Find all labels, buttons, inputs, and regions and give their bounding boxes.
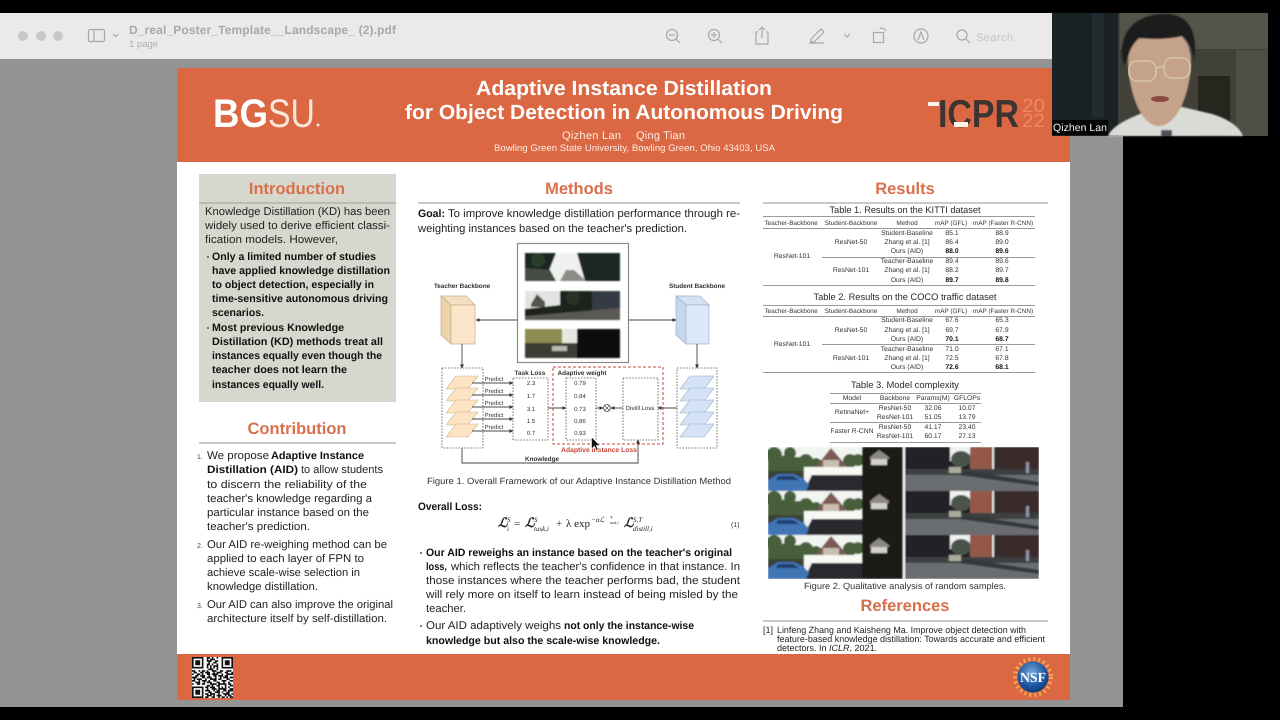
contribution list: Adaptive Instance (271, 450, 364, 462)
table 1: KITTI: 89.4 (945, 258, 959, 265)
table 1: KITTI: Zhang et al. [1] (884, 239, 930, 246)
predict arrows (472, 376, 513, 431)
adaptive instance loss box: Distill Loss (626, 405, 654, 412)
title: for Object Detection in Autonomous Driving (405, 101, 843, 124)
loss formula: ℒ (525, 515, 535, 530)
table 1: KITTI: Table 1. Results on the KITTI dataset (830, 205, 981, 216)
contribution list: achieve scale-wise selection in (207, 567, 360, 579)
table 2: COCO traffic: Zhang et al. [1] (884, 327, 930, 334)
contribution list: We propose (207, 450, 269, 462)
introduction paragraph: widely used to derive efficient classi- (204, 220, 390, 232)
goal statement: Goal: (418, 208, 445, 220)
reference entry: feature-based knowledge distillation: Towards accurate and efficient (777, 634, 1045, 644)
arrow: image to teacher (476, 319, 517, 321)
loss formula: S,T (633, 516, 643, 524)
figure 2 caption: Figure 2. Qualitative analysis of random samples. (804, 581, 1006, 591)
reference entry (763, 625, 1045, 653)
table 1: KITTI: 89.8 (995, 277, 1009, 284)
methods bullets: which reflects the teacher's confidence in that instance. In (450, 561, 740, 573)
logo: NSF: NSF (1020, 671, 1046, 686)
predict arrows: Predict (485, 376, 504, 383)
table 2: COCO traffic: Table 2. Results on the COCO traffic dataset (814, 292, 997, 303)
input image samples (518, 244, 628, 362)
loss formula: S (534, 516, 538, 524)
knowledge arrow (462, 440, 638, 463)
table 1: KITTI: 88.0 (945, 248, 959, 255)
adaptive instance loss box: 0.73 (574, 406, 586, 413)
goal statement: To improve knowledge distillation performance through re- (448, 208, 740, 220)
teacher backbone cube: Teacher Backbone (434, 283, 491, 290)
loss formula: i (507, 525, 509, 533)
introduction paragraph: fication models. However, (205, 234, 338, 246)
contribution list: Our AID re-weighing method can be (207, 539, 387, 551)
introduction bullets: to object detection, especially in (212, 279, 374, 291)
table 1: KITTI: 89.6 (995, 248, 1009, 255)
loss formula: + (556, 518, 562, 530)
poster white body (177, 68, 1070, 700)
heading: methods: Methods (545, 180, 613, 198)
authors (562, 130, 685, 142)
table 2: COCO traffic: 68.1 (995, 364, 1009, 371)
table 2: COCO traffic: Teacher-Baseline (881, 346, 933, 353)
table 2: COCO traffic: 71.0 (945, 346, 959, 353)
contribution list: Distillation (AID) (207, 464, 298, 476)
panel: results (763, 180, 1048, 653)
table 1: KITTI: 89.6 (995, 258, 1009, 265)
table 1: KITTI: mAP (Faster R-CNN) (973, 220, 1033, 227)
reference entry: [1] (763, 625, 773, 635)
poster (177, 68, 1070, 700)
window buttons (18, 31, 63, 41)
table 2: COCO traffic: 65.3 (995, 317, 1009, 324)
loss formula (498, 515, 653, 533)
contribution list: architecture itself by self-distillation. (207, 613, 387, 625)
loss formula: task,i (534, 525, 549, 533)
loss formula: task,i (610, 520, 619, 525)
contribution list: knowledge distillation. (207, 581, 318, 593)
page count: 1 page (129, 39, 158, 50)
predict arrows: Predict (485, 388, 504, 395)
introduction bullets: instances equally well. (212, 379, 324, 391)
table 2: COCO traffic: Ours (AID) (891, 336, 923, 343)
task loss values (513, 370, 548, 440)
table 3: model complexity: Table 3. Model complexity (851, 380, 959, 391)
chevron (844, 34, 850, 37)
rotate icon (874, 28, 886, 42)
table 2: COCO traffic (763, 292, 1035, 372)
methods bullets: Our AID reweighs an instance based on the teacher's original (426, 547, 732, 559)
table 3: model complexity: 32.06 (924, 405, 942, 412)
introduction bullets: have applied knowledge distillation (212, 265, 390, 277)
table 2: COCO traffic: mAP (Faster R-CNN) (973, 308, 1033, 315)
contribution list: teacher's knowledge regarding a (207, 493, 373, 505)
authors: Qizhen Lan (562, 130, 621, 142)
table 2: COCO traffic: Student-Baseline (881, 317, 933, 324)
table 2: COCO traffic: mAP (GFL) (935, 308, 967, 315)
table 1: KITTI: 86.4 (945, 239, 959, 246)
table 1: KITTI: ResNet-101 (774, 253, 810, 260)
search field: Search (976, 32, 1013, 44)
sidebar icon (88, 30, 118, 42)
methods bullets (420, 547, 741, 647)
table 1: KITTI: mAP (GFL) (935, 220, 967, 227)
task loss values: 2.3 (527, 380, 536, 387)
table 1: KITTI: ResNet-101 (833, 267, 869, 274)
table 1: KITTI: Teacher-Backbone (764, 220, 818, 227)
contribution list: 1. (197, 454, 203, 461)
affiliation: Bowling Green State University, Bowling Green, Ohio 43403, USA (494, 143, 776, 154)
loss formula: S (507, 516, 511, 524)
table 2: COCO traffic: Teacher-Backbone (764, 308, 818, 315)
table 3: model complexity: Params(M) (916, 395, 950, 402)
table 3: model complexity: GFLOPs (954, 395, 981, 402)
table 2: COCO traffic: 67.6 (945, 317, 959, 324)
student backbone cube: Student Backbone (669, 283, 725, 290)
loss formula: ℒ (624, 515, 634, 530)
table 1: KITTI: 88.9 (995, 230, 1009, 237)
PDF viewer toolbar (0, 13, 1052, 59)
adaptive instance loss box: 0.79 (574, 380, 586, 387)
glasses (1129, 58, 1190, 81)
table 1: KITTI: 85.1 (945, 230, 959, 237)
methods bullets: Our AID adaptively weighs (426, 620, 561, 632)
title: Adaptive Instance Distillation (476, 77, 772, 100)
table 2: COCO traffic: 70.1 (945, 336, 959, 343)
contribution list: applied to each layer of FPN to (207, 553, 364, 565)
table 2: COCO traffic: Method (896, 308, 918, 315)
markup icon (914, 29, 928, 43)
knowledge arrow: Knowledge (525, 456, 559, 463)
table 2: COCO traffic: Zhang et al. [1] (884, 355, 930, 362)
loss formula: λ exp (566, 518, 590, 530)
table 2: COCO traffic: ResNet-50 (835, 327, 867, 334)
introduction bullets: scenarios. (212, 307, 264, 319)
diagram: framework of adaptive instance distillation (434, 244, 725, 463)
arrow: student to FPN (696, 344, 698, 368)
table 2: COCO traffic: 72.6 (945, 364, 959, 371)
webcam: presenter video (1052, 13, 1268, 136)
adaptive instance loss box: 0.86 (574, 418, 586, 425)
student feature layers (677, 368, 717, 448)
table 2: COCO traffic: ResNet-101 (774, 341, 810, 348)
title (405, 77, 843, 124)
goal statement: weighting instances based on the teacher's prediction. (417, 223, 687, 235)
logo: BGSU: BG (213, 92, 268, 136)
pen icon (809, 29, 824, 43)
heading: introduction: Introduction (249, 180, 345, 198)
introduction bullets (207, 251, 390, 391)
table 1: KITTI: 89.0 (995, 239, 1009, 246)
logo: BGSU: SU (268, 92, 315, 136)
arrow: task loss to adaptive weight (548, 407, 566, 409)
introduction paragraph (204, 206, 390, 246)
table 3: model complexity: Backbone (880, 395, 910, 402)
introduction bullets: time-sensitive autonomous driving (212, 293, 388, 305)
table 3: model complexity (830, 380, 981, 442)
table 3: model complexity: Faster R-CNN (830, 428, 874, 435)
heading: contribution: Contribution (248, 420, 346, 438)
file name: D_real_Poster_Template__Landscape_ (2).pdf (129, 23, 397, 37)
zoom in icon (708, 30, 722, 43)
reference entry: detectors. In ICLR, 2021. (777, 643, 877, 653)
table 1: KITTI: Method (896, 220, 918, 227)
background wall (1120, 13, 1268, 49)
table 1: KITTI: 89.7 (995, 267, 1009, 274)
loss formula: −αℒ (591, 516, 605, 524)
table 3: model complexity: 23.40 (958, 424, 976, 431)
heading: references: References (861, 597, 949, 615)
authors: Qing Tian (636, 130, 685, 142)
student backbone cube (669, 283, 725, 344)
presenter figure (1108, 14, 1243, 136)
loss formula: ℒ (498, 515, 508, 530)
contribution list: particular instance based on the (207, 507, 369, 519)
teacher backbone cube (434, 283, 491, 344)
logo: BGSU (213, 92, 320, 136)
panel: introduction (199, 174, 396, 402)
table 2: COCO traffic: Student-Backbone (825, 308, 878, 315)
introduction bullets: Distillation (KD) methods treat all (212, 336, 383, 348)
figure 1 caption: Figure 1. Overall Framework of our Adaptive Instance Distillation Method (427, 476, 731, 486)
table 3: model complexity: 27.13 (958, 433, 976, 440)
task loss values: Task Loss (515, 370, 546, 377)
contribution list (197, 450, 393, 625)
poster header band (177, 68, 1070, 162)
task loss values: 1.5 (527, 418, 536, 425)
contribution list: 2. (197, 543, 203, 550)
table 1: KITTI: Student-Baseline (881, 230, 933, 237)
methods bullets: not only the instance-wise (564, 620, 694, 632)
table 3: model complexity: 60.17 (924, 433, 942, 440)
table 3: model complexity: ResNet-101 (877, 433, 913, 440)
table 3: model complexity: ResNet-50 (879, 424, 911, 431)
table 1: KITTI: Ours (AID) (891, 277, 923, 284)
contribution list: to discern the reliability of the (207, 479, 367, 491)
figure 2: qualitative samples (766, 447, 1039, 579)
table 1: KITTI: Student-Backbone (825, 220, 878, 227)
table 3: model complexity: RetinaNet+ (835, 409, 869, 416)
table 3: model complexity: Model (843, 395, 862, 402)
logo: ICPR 2022: 20 (1022, 96, 1045, 117)
goal statement (417, 208, 740, 235)
zoom out icon (666, 30, 680, 43)
predict arrows: Predict (485, 412, 504, 419)
table 3: model complexity: 13.79 (958, 414, 976, 421)
heading: results: Results (875, 180, 935, 198)
mouse cursor (592, 437, 600, 450)
reference entry: Linfeng Zhang and Kaisheng Ma. Improve object detection with (777, 625, 1026, 635)
methods bullets: loss, (426, 561, 447, 573)
arrow: teacher to FPN (461, 344, 463, 368)
table 1: KITTI: Teacher-Baseline (881, 258, 933, 265)
contribution list: Our AID can also improve the original (207, 599, 393, 611)
adaptive instance loss box: Adaptive weight (557, 370, 607, 377)
table 2: COCO traffic: 69.7 (945, 327, 959, 334)
adaptive instance loss box (553, 367, 663, 454)
methods bullets: teacher. (426, 603, 466, 615)
predict arrows: Predict (485, 400, 504, 407)
table 2: COCO traffic: 67.8 (995, 355, 1009, 362)
table 2: COCO traffic: 67.1 (995, 346, 1009, 353)
table 3: model complexity: ResNet-101 (877, 414, 913, 421)
adaptive instance loss box: Adaptive Instance Loss (561, 447, 637, 454)
methods bullets: will rely more on itself to learn instead of being misled by the (425, 589, 738, 601)
table 1: KITTI: Ours (AID) (891, 248, 923, 255)
share icon (756, 27, 768, 44)
teacher feature layers (442, 368, 483, 448)
name tag: Qizhen Lan (1053, 122, 1107, 134)
task loss values: 0.7 (527, 430, 536, 437)
panel: contribution (197, 420, 396, 625)
arrow: student FPN to distill loss (658, 407, 677, 409)
methods bullets: those instances where the teacher performs bad, the student (426, 575, 741, 587)
adaptive instance loss box: 0.84 (574, 393, 586, 400)
contribution list: to allow students (301, 464, 383, 476)
equation number: (1) (731, 521, 740, 529)
table 2: COCO traffic: ResNet-101 (833, 355, 869, 362)
table 3: model complexity: 10.07 (958, 405, 976, 412)
QR code (192, 657, 233, 698)
table 2: COCO traffic: Ours (AID) (891, 364, 923, 371)
introduction bullets: teacher does not learn the (212, 364, 347, 376)
table 1: KITTI: ResNet-50 (835, 239, 867, 246)
logo: ICPR 2022: ICPR (938, 93, 1019, 136)
arrow: image to student (629, 319, 676, 321)
poster footer band (177, 654, 1070, 700)
methods bullets: knowledge but also the scale-wise knowledge. (426, 635, 660, 647)
introduction bullets: instances equally even though the (212, 350, 382, 362)
search field (957, 30, 1013, 44)
table 3: model complexity: ResNet-50 (879, 405, 911, 412)
table 2: COCO traffic: 68.7 (995, 336, 1009, 343)
table 3: model complexity: 51.05 (924, 414, 942, 421)
overall loss label: Overall Loss: (418, 501, 482, 513)
introduction paragraph: Knowledge Distillation (KD) has been (205, 206, 390, 218)
table 1: KITTI: 88.2 (945, 267, 959, 274)
table 3: model complexity: 41.17 (924, 424, 942, 431)
adaptive instance loss box: 0.93 (574, 430, 586, 437)
predict arrows: Predict (485, 424, 504, 431)
loss formula: distill,i (633, 525, 653, 533)
table 1: KITTI: 89.7 (945, 277, 959, 284)
introduction bullets: Only a limited number of studies (212, 251, 376, 263)
panel: methods (417, 180, 741, 647)
logo: ICPR 2022: 22 (1022, 111, 1045, 132)
task loss values: 1.7 (527, 393, 536, 400)
table 2: COCO traffic: 72.5 (945, 355, 959, 362)
loss formula: = (514, 518, 520, 530)
contribution list: 3. (197, 603, 203, 610)
introduction bullets: Most previous Knowledge (212, 322, 344, 334)
task loss values: 3.1 (527, 406, 536, 413)
contribution list: teacher's prediction. (207, 521, 310, 533)
table 2: COCO traffic: 67.9 (995, 327, 1009, 334)
loss formula: T (610, 515, 613, 520)
table 1: KITTI (763, 205, 1035, 286)
table 1: KITTI: Zhang et al. [1] (884, 267, 930, 274)
logo: NSF (1015, 659, 1051, 695)
